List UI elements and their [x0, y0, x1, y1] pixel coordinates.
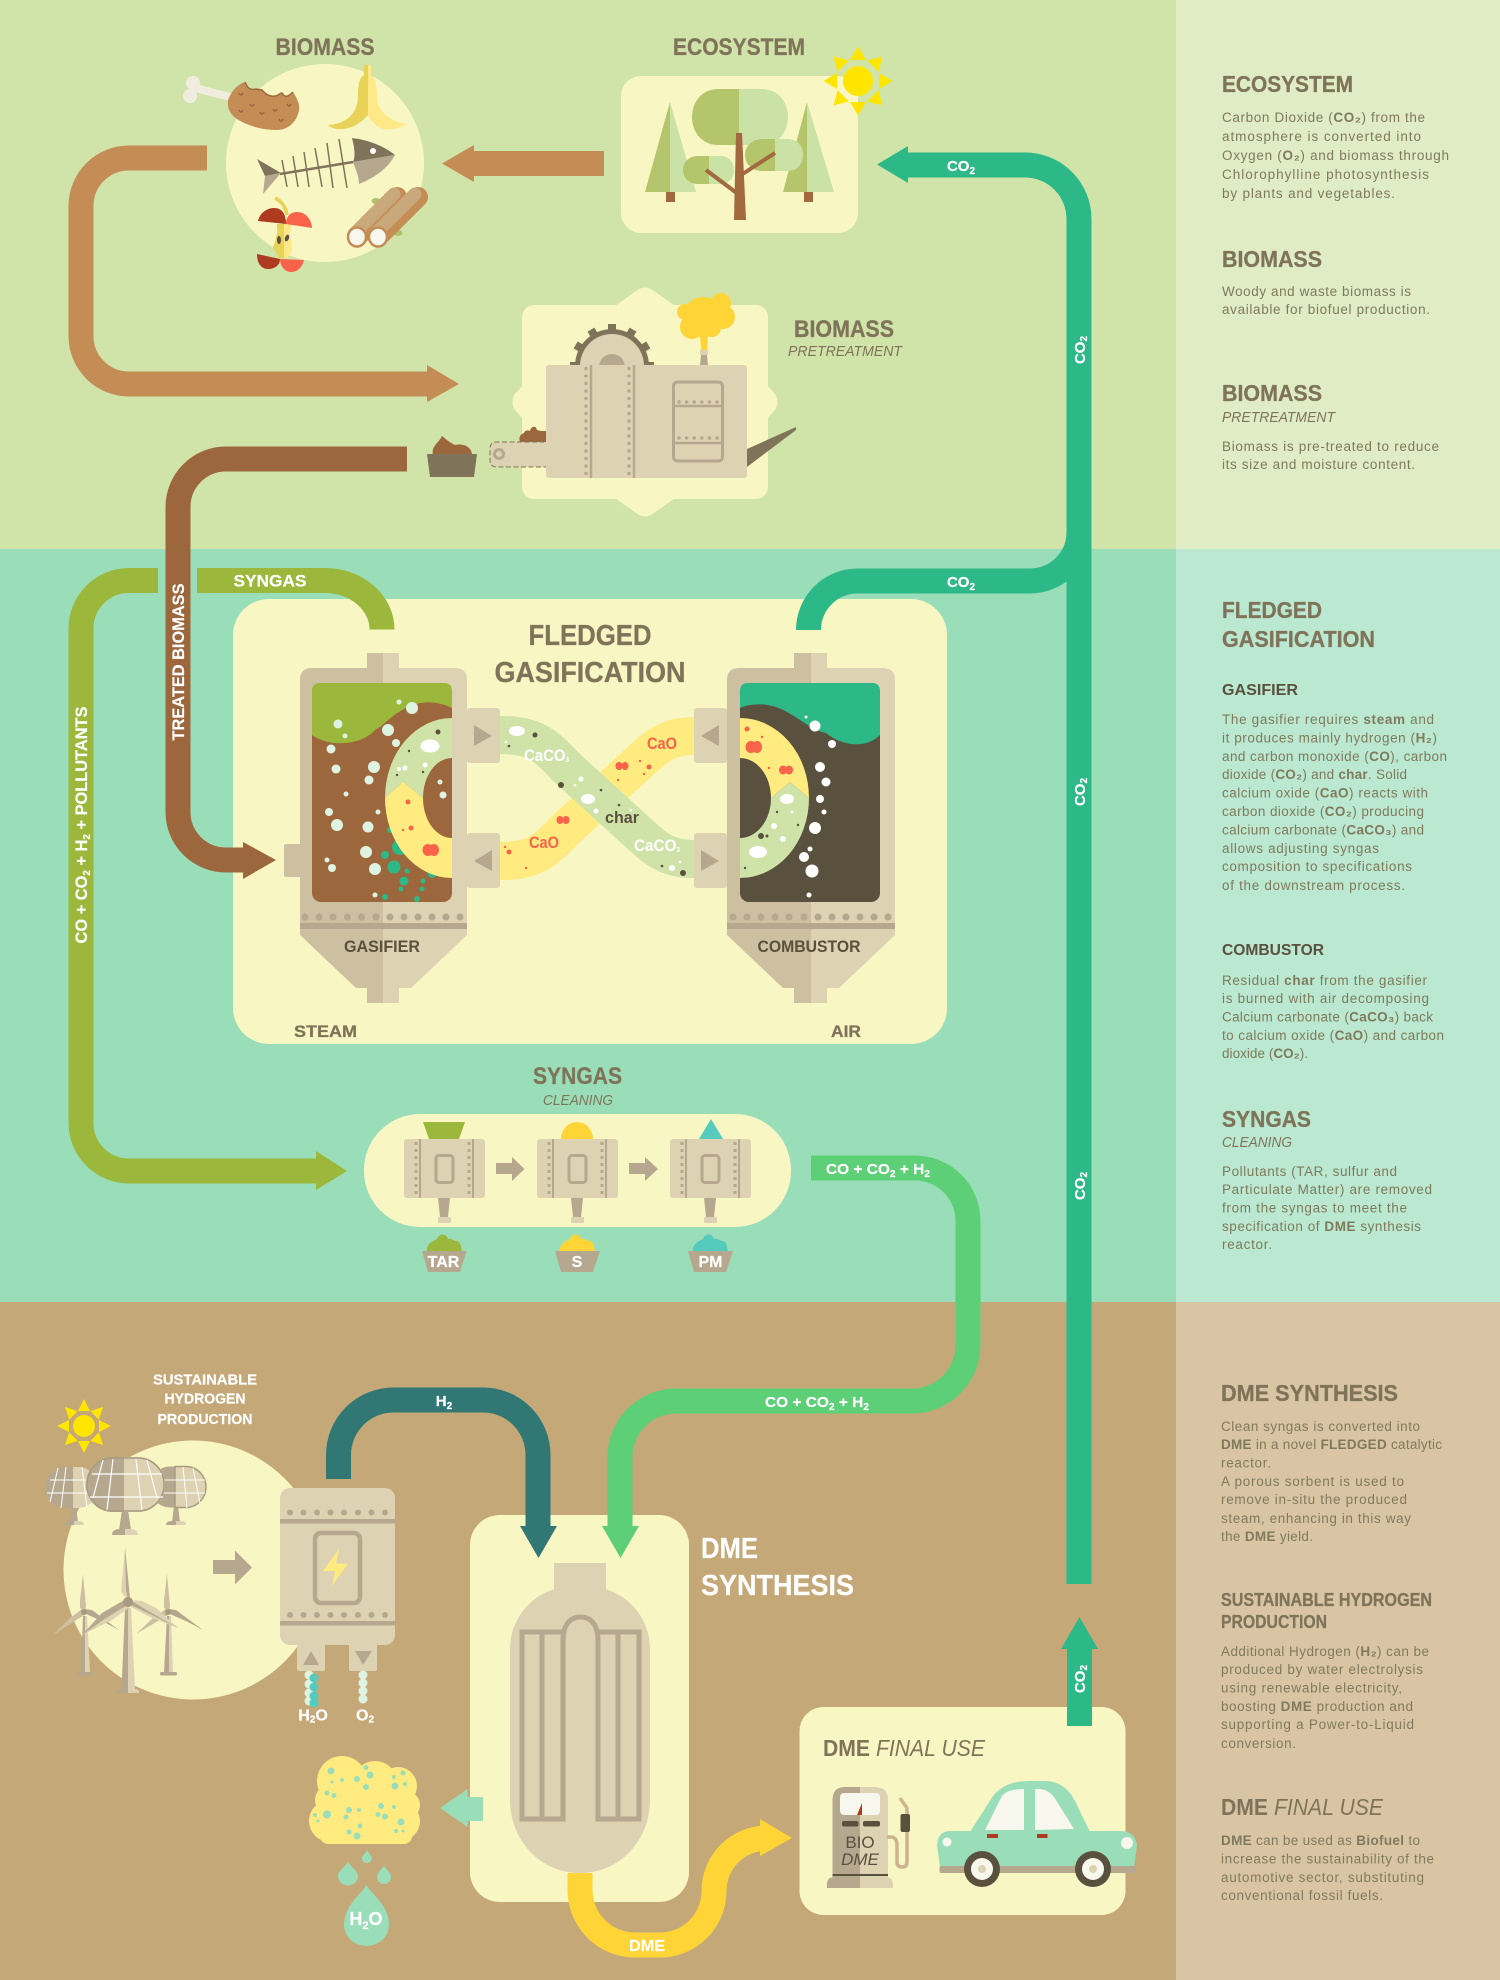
heading: dme synthesis: SYNTHESIS	[701, 1570, 854, 1602]
reactor: electrolyzer	[280, 1488, 395, 1671]
heading: ecosystem: ECOSYSTEM	[673, 34, 805, 61]
text block: dme synthesis: DME in a novel FLEDGED catalytic	[1221, 1437, 1442, 1452]
arrow: h2: 2	[447, 1401, 453, 1412]
icon: solar panel left	[45, 1467, 98, 1525]
arrow: dme out	[580, 1819, 792, 1955]
text block: syngas cleaning	[1222, 1106, 1432, 1252]
text block: syngas cleaning: reactor.	[1222, 1237, 1272, 1252]
icon: h2o bubbles	[304, 1670, 318, 1708]
text block: dme final use: increase the sustainability of the	[1221, 1852, 1434, 1866]
side band: biomass	[1176, 0, 1500, 549]
arrow: dme out: DME	[629, 1938, 665, 1955]
text block: syngas cleaning: Pollutants (TAR, sulfur and	[1222, 1164, 1397, 1179]
arrow: co + co2 + h2 + pollutants	[73, 580, 347, 1190]
panel: ecosystem	[621, 76, 858, 233]
machine body	[546, 365, 747, 478]
text block: sustainable hydrogen production: boosting DME production and	[1221, 1699, 1413, 1714]
panel: renewable energy circle	[64, 1440, 322, 1700]
icon: wind turbine centre	[82, 1547, 178, 1693]
label: char: char	[605, 808, 639, 827]
side band: dme	[1176, 1302, 1500, 1980]
text block: gasifier: dioxide (CO₂) and char. Solid	[1222, 767, 1407, 782]
text block: dme final use: automotive sector, substituting	[1221, 1870, 1424, 1885]
heading: sustainable hydrogen production: SUSTAINABLE	[153, 1372, 257, 1388]
text block: sustainable hydrogen production: supporting a Power-to-Liquid	[1221, 1717, 1414, 1732]
text block: ecosystem: Oxygen (O₂) and biomass through	[1222, 148, 1449, 163]
label: caco3 upper: 3	[566, 757, 569, 764]
text block: combustor: Residual char from the gasifier	[1222, 973, 1428, 988]
icon: fish bones	[257, 138, 395, 194]
arrow: co + co2 + h2 + pollutants: + POLLUTANTS	[73, 706, 91, 834]
text block: dme final use: conventional fossil fuels.	[1221, 1888, 1383, 1903]
arrow: clean syngas: + H	[896, 1161, 924, 1178]
icon: porous sorbent sponge	[309, 1756, 420, 1844]
text block: syngas cleaning: specification of DME synthesis	[1222, 1219, 1421, 1234]
text block: gasifier: The gasifier requires steam and	[1222, 712, 1434, 727]
label: h2o: 2	[310, 1714, 316, 1726]
text block: ecosystem: Carbon Dioxide (CO₂) from the	[1222, 110, 1425, 125]
heading: biomass pretreatment: BIOMASS	[794, 316, 894, 343]
text block: gasifier: of the downstream process.	[1222, 878, 1405, 893]
text block: gasifier: and carbon monoxide (CO), carbon	[1222, 749, 1447, 764]
text block: gasifier: allows adjusting syngas	[1222, 841, 1379, 856]
heading: biomass: BIOMASS	[276, 34, 374, 61]
label: cao lower: CaO	[529, 833, 559, 852]
text block: gasifier	[1222, 682, 1447, 893]
label: o2: O	[356, 1708, 368, 1724]
bucket: pm	[688, 1234, 733, 1272]
text block: gasifier: GASIFIER	[1222, 682, 1298, 699]
bucket: pm: PM	[698, 1254, 722, 1271]
label: h2o: H	[298, 1708, 310, 1724]
heading: fledged gasification	[494, 620, 686, 689]
label: combustor: COMBUSTOR	[758, 937, 860, 956]
icon: solar panel centre	[86, 1457, 165, 1535]
heading: fledged gasification: GASIFICATION	[494, 657, 686, 689]
text block: combustor	[1222, 942, 1444, 1061]
icon: chicken leg	[183, 76, 299, 130]
text block: biomass pretreatment: PRETREATMENT	[1222, 409, 1337, 426]
bucket: sulfur	[555, 1234, 600, 1272]
bucket: tar: TAR	[428, 1254, 460, 1271]
text block: syngas cleaning: from the syngas to meet the	[1222, 1200, 1407, 1216]
arrow: co2 main return	[877, 146, 1090, 1584]
arrow: co2 from combustor	[808, 532, 1079, 630]
icon: sun top	[824, 46, 892, 116]
arrow: syngas	[197, 572, 382, 630]
text block: combustor: Calcium carbonate (CaCO₃) back	[1222, 1010, 1433, 1024]
arrow: co2 main return: CO	[1072, 1178, 1089, 1200]
text block: dme final use	[1221, 1794, 1434, 1903]
panel: dme final use	[800, 1707, 1137, 1915]
icon: fuel pump: DME	[841, 1850, 880, 1869]
heading: sustainable hydrogen production: PRODUCTION	[158, 1411, 252, 1428]
panel: biomass circle	[183, 64, 424, 272]
arrow: co2 main return: 2	[969, 166, 975, 177]
arrow: co2 main return: 2	[1079, 1172, 1090, 1178]
heading: sustainable hydrogen production: HYDROGEN	[164, 1390, 246, 1408]
text block: gasifier: calcium carbonate (CaCO₃) and	[1222, 822, 1424, 838]
icon: conveyor	[490, 442, 552, 467]
text block: sustainable hydrogen production: conversion.	[1221, 1736, 1296, 1751]
icon: conifer left	[645, 102, 696, 202]
arrow: co2 from final use: CO	[1072, 1671, 1089, 1693]
arrow: clean syngas: 2	[890, 1169, 896, 1180]
icon: logs	[348, 194, 418, 246]
icon: broadleaf tree	[683, 89, 803, 220]
icon: smoke	[677, 293, 735, 365]
text block: dme final use: DME can be used as Biofuel to	[1221, 1833, 1420, 1848]
label: h2o drop: H	[349, 1909, 362, 1929]
label: h2o: O	[315, 1708, 328, 1724]
text block: syngas cleaning: Particulate Matter) are removed	[1222, 1182, 1432, 1197]
arrow: co2 main return: CO	[1072, 342, 1089, 364]
arrow: ecosystem to biomass	[442, 145, 604, 182]
arrow: co + co2 + h2 + pollutants: 2	[82, 870, 93, 876]
reactor: gasifier	[284, 653, 500, 1003]
text block: gasifier: carbon dioxide (CO₂) producing	[1222, 804, 1424, 819]
arrow: first cleaning step	[496, 1157, 524, 1181]
reactor: combustor	[694, 653, 895, 1003]
icon: fuel pump: BIO	[845, 1833, 875, 1852]
text block: gasifier: it produces mainly hydrogen (H₂)	[1222, 730, 1437, 746]
arrow: co2 from combustor: 2	[969, 582, 975, 593]
arrow: co2 main return: 2	[1079, 778, 1090, 784]
scrubber: sulfur	[537, 1122, 618, 1223]
text block: dme synthesis: reactor.	[1221, 1456, 1271, 1470]
label: cao upper: CaO	[647, 734, 677, 753]
label: caco3 upper: CaCO	[524, 746, 571, 765]
icon: conifer right	[783, 102, 834, 202]
arrow: clean syngas: 2	[924, 1169, 930, 1180]
arrow: treated biomass	[170, 459, 407, 879]
icon: sun lower	[57, 1399, 111, 1453]
arrow: co + co2 + h2 + pollutants: + H	[73, 840, 91, 870]
text block: fledged gasification: GASIFICATION	[1222, 626, 1375, 652]
text block: biomass pretreatment: its size and moisture content.	[1222, 457, 1415, 472]
icon: car	[937, 1781, 1137, 1887]
text block: biomass: Woody and waste biomass is	[1222, 284, 1411, 299]
scrubber: particulate matter	[670, 1119, 751, 1223]
label: caco3 lower: CaCO	[634, 836, 681, 855]
text block: dme final use: DME FINAL USE	[1221, 1794, 1384, 1820]
arrow: co2 from final use: 2	[1079, 1665, 1090, 1671]
icon: wind turbine left	[53, 1574, 119, 1676]
heading: dme synthesis	[701, 1533, 854, 1602]
arrow: co2 main return: CO	[1072, 784, 1089, 806]
heading: biomass pretreatment: PRETREATMENT	[788, 343, 904, 360]
band: caco3 loop	[500, 726, 694, 876]
panel: pretreatment	[490, 288, 796, 516]
arrow: co2 from combustor: CO	[947, 574, 969, 591]
arrow: clean syngas: CO + CO	[826, 1161, 888, 1178]
text block: syngas cleaning: SYNGAS	[1222, 1106, 1311, 1132]
panel: fledged gasification	[233, 599, 947, 1044]
bucket: sulfur: S	[572, 1254, 583, 1271]
text block: ecosystem: atmosphere is converted into	[1222, 129, 1421, 144]
text block: biomass: available for biofuel production.	[1222, 302, 1430, 317]
side band: gasification	[1176, 549, 1500, 1302]
icon: solar panel right	[150, 1466, 206, 1525]
text block: ecosystem	[1222, 71, 1449, 201]
icon: biomass on conveyor	[519, 427, 546, 442]
label: h2o drop: O	[369, 1909, 383, 1929]
arrow: co + co2 + h2 + pollutants: CO + CO	[73, 875, 91, 944]
label: o2: 2	[368, 1714, 374, 1726]
heading: syngas cleaning: CLEANING	[543, 1092, 613, 1109]
arrow: treated biomass: TREATED BIOMASS	[170, 584, 188, 740]
text block: sustainable hydrogen production: produced by water electrolysis	[1221, 1662, 1423, 1677]
arrow: renewable power to electrolyzer	[213, 1550, 252, 1584]
text block: dme synthesis	[1221, 1380, 1442, 1544]
label: steam: STEAM	[294, 1022, 357, 1041]
text block: biomass: BIOMASS	[1222, 246, 1322, 272]
panel: dme synthesis	[470, 1515, 792, 1955]
band: biomass	[0, 0, 1176, 549]
icon: water drops	[338, 1850, 391, 1946]
text block: dme synthesis: Clean syngas is converted into	[1221, 1419, 1420, 1434]
text block: sustainable hydrogen production: SUSTAINABLE HYDROGEN	[1221, 1590, 1432, 1610]
arrow: co2 main return: 2	[1079, 336, 1090, 342]
icon: apple core	[257, 198, 312, 272]
text block: biomass pretreatment: Biomass is pre-treated to reduce	[1222, 439, 1439, 454]
arrow: co + co2 + h2 + pollutants: 2	[82, 834, 93, 840]
text block: sustainable hydrogen production: PRODUCTION	[1221, 1612, 1327, 1632]
arrow: clean syngas: 2	[829, 1402, 835, 1413]
text block: dme synthesis: the DME yield.	[1221, 1529, 1313, 1544]
text block: ecosystem: Chlorophylline photosynthesis	[1222, 167, 1429, 182]
icon: o2 bubbles	[358, 1670, 368, 1704]
heading: dme synthesis: DME	[701, 1533, 758, 1565]
arrow: h2: H	[436, 1393, 447, 1410]
icon: wind turbine right	[136, 1574, 203, 1676]
arrow: clean syngas: + H	[835, 1394, 863, 1411]
label: caco3 lower: 3	[676, 847, 680, 854]
text block: sustainable hydrogen production: Additional Hydrogen (H₂) can be	[1221, 1644, 1429, 1659]
bucket: tar	[422, 1234, 466, 1272]
label: air: AIR	[831, 1022, 861, 1041]
heading: fledged gasification: FLEDGED	[528, 620, 652, 652]
text block: dme synthesis: remove in-situ the produced	[1221, 1492, 1407, 1507]
text block: combustor: is burned with air decomposing	[1222, 991, 1429, 1006]
arrow: biomass to pretreatment	[81, 158, 459, 402]
arrow: second cleaning step	[629, 1157, 658, 1181]
icon: cone outlet	[747, 427, 796, 467]
arrow: clean syngas	[602, 1161, 968, 1558]
arrow: co2 from final use	[1061, 1617, 1098, 1726]
arrow: water out	[440, 1789, 483, 1827]
text block: combustor: to calcium oxide (CaO) and carbon	[1222, 1028, 1444, 1043]
text block: ecosystem: by plants and vegetables.	[1222, 186, 1395, 201]
arrow: co2 main return: CO	[947, 158, 969, 175]
text block: combustor: dioxide (CO₂).	[1222, 1046, 1308, 1061]
label: h2o drop: 2	[362, 1920, 369, 1932]
heading: biomass pretreatment	[788, 316, 904, 360]
icon: bucket of treated biomass	[427, 436, 477, 477]
text block: fledged gasification: FLEDGED	[1222, 597, 1322, 623]
text block: fledged gasification	[1222, 597, 1375, 652]
text block: dme synthesis: A porous sorbent is used to	[1221, 1474, 1404, 1489]
text block: dme synthesis: steam, enhancing in this way	[1221, 1511, 1411, 1526]
heading: syngas cleaning	[533, 1063, 622, 1109]
arrow: syngas: SYNGAS	[234, 572, 306, 590]
text block: ecosystem: ECOSYSTEM	[1222, 71, 1353, 97]
panel: syngas cleaning	[364, 1114, 791, 1227]
icon: fuel pump	[827, 1787, 910, 1888]
heading: sustainable hydrogen production	[153, 1372, 257, 1428]
text block: dme synthesis: DME SYNTHESIS	[1221, 1380, 1398, 1406]
band: dme	[0, 1302, 1176, 1980]
heading: syngas cleaning: SYNGAS	[533, 1063, 622, 1090]
scrubber: tar	[404, 1122, 485, 1223]
text block: gasifier: composition to specifications	[1222, 859, 1412, 874]
text block: sustainable hydrogen production: using renewable electricity,	[1221, 1680, 1402, 1696]
band: cao loop	[500, 736, 694, 869]
text block: combustor: COMBUSTOR	[1222, 942, 1324, 959]
arrow: clean syngas: 2	[863, 1402, 869, 1413]
text block: biomass	[1222, 246, 1430, 317]
label: gasifier: GASIFIER	[344, 937, 420, 956]
text block: syngas cleaning: CLEANING	[1222, 1134, 1292, 1151]
arrow: clean syngas: CO + CO	[765, 1394, 827, 1411]
icon: saw gear	[570, 324, 654, 403]
reactor: dme vessel	[510, 1563, 650, 1873]
heading: dme final use: DME FINAL USE	[823, 1735, 986, 1761]
text block: gasifier: calcium oxide (CaO) reacts with	[1222, 786, 1428, 800]
band: gasification	[0, 549, 1176, 1302]
text block: biomass pretreatment	[1222, 380, 1439, 472]
text block: biomass pretreatment: BIOMASS	[1222, 380, 1322, 406]
icon: banana peel	[328, 65, 407, 129]
text block: sustainable hydrogen production	[1221, 1590, 1432, 1751]
arrow: h2	[338, 1393, 557, 1558]
